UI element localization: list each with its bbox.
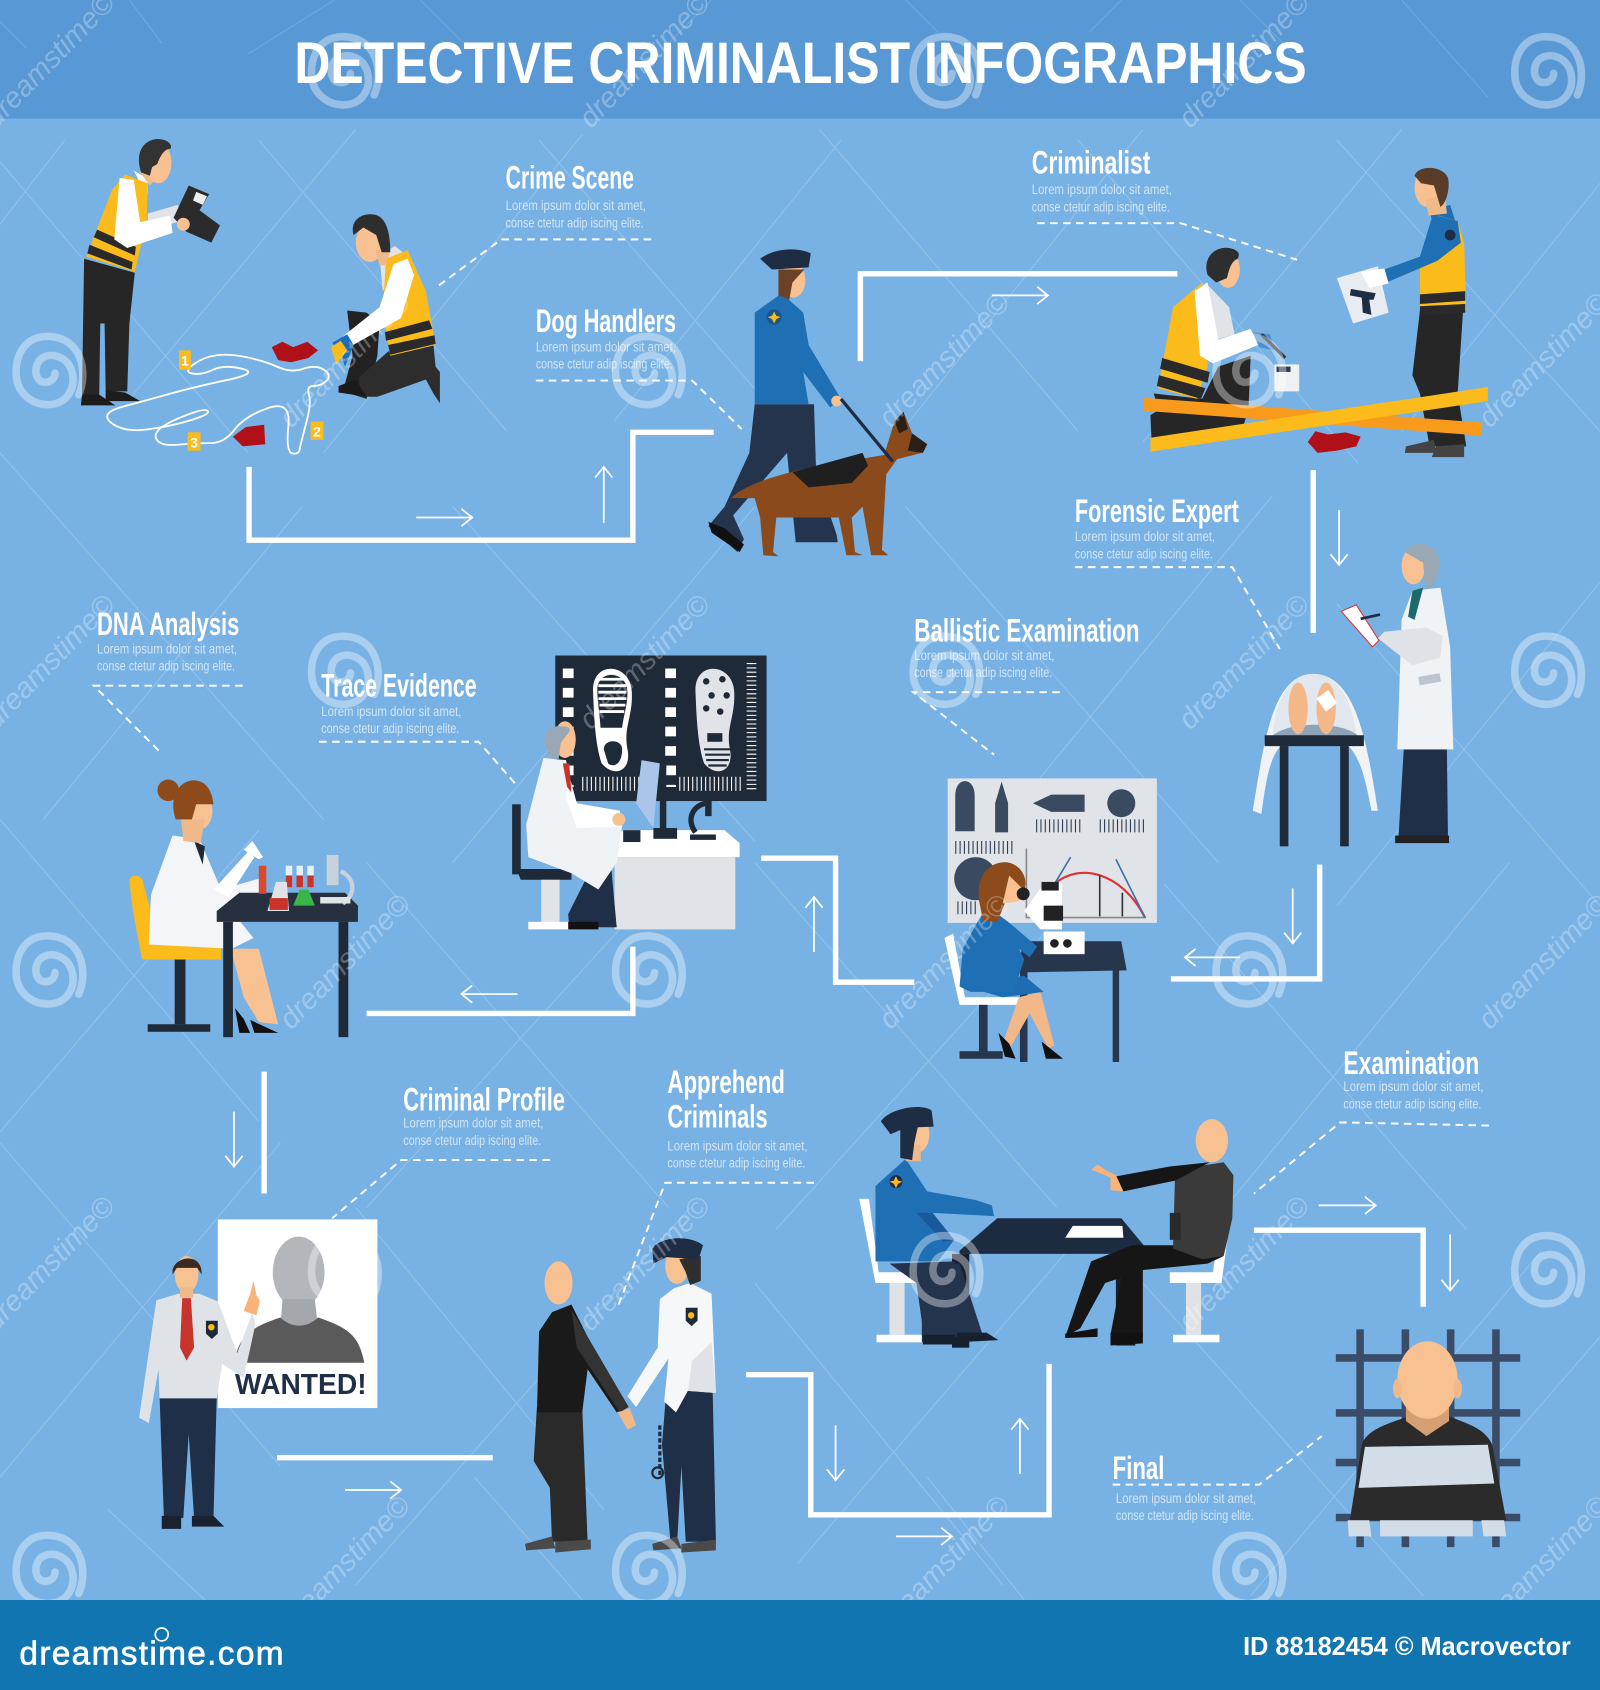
figure: interrogating officer — [875, 1107, 998, 1344]
figure: prisoner — [1348, 1341, 1506, 1536]
icon: evidence markers: 1 — [181, 352, 189, 368]
watermark text: dreamstime© — [1172, 1190, 1316, 1337]
watermark text: dreamstime© — [273, 286, 417, 434]
label: Dog Handlers — [536, 303, 742, 429]
figure: interrogated suspect — [1065, 1119, 1233, 1346]
flow connector lines and arrows — [225, 274, 1459, 1545]
scene: examination interrogation — [859, 1107, 1233, 1348]
watermark text: dreamstime© — [873, 286, 1017, 434]
footer logo mark — [155, 1628, 168, 1641]
label: Criminalist: Lorem ipsum dolor sit amet, — [1032, 182, 1172, 197]
figure: police officer with handcuffs — [627, 1238, 716, 1553]
connector: forensic expert to ballistic examination — [1171, 865, 1320, 979]
label: Ballistic Examination: Lorem ipsum dolor sit amet, — [914, 648, 1054, 663]
panel: ballistic chart board — [948, 778, 1157, 923]
label: Crime Scene: Lorem ipsum dolor sit amet, — [506, 198, 646, 213]
icon: shoeprint left — [593, 669, 632, 771]
icon: chalk body outline — [107, 355, 329, 454]
watermark text: dreamstime© — [873, 888, 1017, 1035]
figure: police dog handler — [708, 249, 842, 552]
label: Apprehend Criminals: conse ctetur adip iscing elite. — [667, 1156, 805, 1171]
watermark text: dreamstime© — [1172, 588, 1316, 736]
label: Criminalist — [1032, 145, 1297, 260]
icon: interrogation table — [952, 1218, 1148, 1348]
header band — [0, 0, 1600, 119]
scene: criminal profile — [139, 1219, 377, 1529]
icon: crime scene tape — [1144, 387, 1488, 452]
scene: crime scene — [81, 139, 440, 454]
barcode scales — [955, 826, 1145, 908]
icon: evidence markers: 2 — [313, 424, 321, 440]
connector: criminalist to forensic expert — [1313, 470, 1348, 633]
label: Dog Handlers: Lorem ipsum dolor sit amet, — [536, 339, 676, 354]
label: Apprehend Criminals: Criminals — [667, 1099, 768, 1135]
scene: final prison — [1336, 1329, 1520, 1547]
label: Criminal Profile: Criminal Profile — [403, 1081, 565, 1117]
icon: computer desk — [606, 760, 740, 929]
label: Ballistic Examination: conse ctetur adip iscing elite. — [914, 665, 1052, 680]
chart: ballistic trajectory — [1026, 849, 1146, 918]
icon: bullets — [954, 781, 1135, 900]
label: Ballistic Examination: Ballistic Examination — [914, 612, 1140, 648]
label: Forensic Expert — [1075, 493, 1280, 649]
figure: woman at microscope — [944, 862, 1063, 1059]
label: DNA Analysis: DNA Analysis — [97, 606, 239, 642]
label: Final: Lorem ipsum dolor sit amet, — [1116, 1491, 1256, 1506]
label: Trace Evidence: conse ctetur adip iscing elite. — [321, 721, 459, 736]
label: DNA Analysis: Lorem ipsum dolor sit amet, — [97, 641, 237, 656]
scene: apprehend criminals — [525, 1238, 716, 1553]
panel: shoeprint board — [555, 656, 767, 801]
poster text: WANTED! — [235, 1369, 367, 1401]
label: Crime Scene: conse ctetur adip iscing elite. — [506, 215, 644, 230]
label: Criminal Profile — [332, 1081, 565, 1218]
connector: trace evidence to DNA analysis — [367, 947, 633, 1013]
label: Apprehend Criminals — [618, 1064, 814, 1307]
scene: criminalist — [1144, 168, 1488, 457]
label: Final — [1113, 1436, 1322, 1523]
scene: DNA analysis — [129, 780, 358, 1037]
icon: interrogation chairs — [859, 1199, 1228, 1342]
figure: detective presenting — [139, 1256, 260, 1529]
icon: blood stains — [233, 342, 318, 446]
label: Trace Evidence — [319, 667, 515, 784]
label: Forensic Expert: Lorem ipsum dolor sit amet, — [1075, 529, 1215, 544]
checker scales and rulers — [563, 668, 573, 787]
watermark text: dreamstime© — [573, 1190, 717, 1337]
connector: apprehend criminals to examination — [746, 1364, 1049, 1545]
title: DETECTIVE CRIMINALIST INFOGRAPHICS — [294, 31, 1307, 96]
watermark text: dreamstime© — [873, 1490, 1017, 1637]
watermark text: dreamstime© — [573, 588, 717, 736]
footer credit text: ID 88182454 © Macrovector — [1243, 1633, 1571, 1661]
label: DNA Analysis: conse ctetur adip iscing elite. — [97, 659, 235, 674]
label: Examination: Lorem ipsum dolor sit amet, — [1343, 1079, 1484, 1094]
label: Dog Handlers: conse ctetur adip iscing elite. — [536, 357, 673, 372]
icon: lab desk with samples — [217, 855, 358, 1037]
label: Criminalist: conse ctetur adip iscing elite. — [1032, 199, 1170, 214]
connector: DNA analysis to criminal profile — [225, 1072, 264, 1194]
connector: criminal profile to apprehend criminals — [277, 1458, 493, 1499]
label: Ballistic Examination — [913, 612, 1140, 755]
panel: wanted poster — [218, 1219, 377, 1408]
icon: evidence markers — [179, 350, 323, 451]
label: Forensic Expert: conse ctetur adip iscing elite. — [1075, 546, 1213, 561]
scene: trace evidence — [512, 656, 767, 929]
label: Examination — [1254, 1045, 1489, 1194]
figure: police dog — [731, 399, 927, 556]
watermark text: dreamstime© — [273, 1490, 417, 1637]
connector: ballistic examination to trace evidence — [761, 858, 914, 982]
icon: lab desk with microscope — [1016, 882, 1127, 1062]
connector: dog handlers to criminalist — [860, 274, 1177, 361]
scene: ballistic examination — [944, 778, 1157, 1062]
label: DNA Analysis — [94, 606, 243, 751]
footer brand text: dreamstime.com — [19, 1636, 284, 1673]
figure: photographer — [81, 139, 220, 405]
label: Apprehend Criminals: Apprehend — [667, 1064, 785, 1100]
label: Crime Scene — [436, 160, 651, 288]
icon: prison bars — [1336, 1329, 1520, 1547]
label: Criminalist: Criminalist — [1032, 145, 1151, 181]
label: Criminal Profile: Lorem ipsum dolor sit amet, — [403, 1116, 543, 1131]
header line pattern — [0, 0, 1488, 97]
label: Examination: Examination — [1343, 1045, 1479, 1081]
label: Forensic Expert: Forensic Expert — [1075, 493, 1239, 529]
connector: examination to final — [1254, 1197, 1459, 1307]
figure: suspect in black — [525, 1261, 636, 1553]
icon: shoeprint right — [695, 669, 734, 771]
label: Final: conse ctetur adip iscing elite. — [1116, 1508, 1254, 1523]
label: Final: Final — [1113, 1450, 1164, 1486]
label: Trace Evidence: Trace Evidence — [321, 667, 477, 703]
label: Examination: conse ctetur adip iscing elite. — [1343, 1096, 1481, 1111]
watermark text: dreamstime© — [273, 888, 417, 1035]
label: Dog Handlers: Dog Handlers — [536, 303, 676, 339]
label: Trace Evidence: Lorem ipsum dolor sit amet, — [321, 704, 461, 719]
icon: evidence markers: 3 — [190, 434, 198, 450]
scene: dog handler — [708, 249, 927, 556]
figure: kneeling criminalist — [1150, 248, 1299, 440]
figure: forensic doctor — [1341, 544, 1453, 843]
footer band — [0, 1600, 1600, 1690]
label: Apprehend Criminals: Lorem ipsum dolor sit amet, — [667, 1138, 808, 1153]
figure: standing officer with evidence — [1337, 168, 1466, 457]
label: Criminal Profile: conse ctetur adip iscing elite. — [403, 1133, 541, 1148]
figure: lab technician — [129, 780, 278, 1033]
figure: analyst at computer — [512, 721, 625, 929]
label: Crime Scene: Crime Scene — [506, 160, 634, 196]
icon: morgue table with sheet — [1253, 674, 1378, 846]
figure: kneeling investigator — [331, 214, 440, 403]
icon: blood stain — [1308, 431, 1361, 453]
connector: crime scene to dog handlers — [249, 432, 714, 540]
scene: forensic expert — [1253, 544, 1453, 846]
